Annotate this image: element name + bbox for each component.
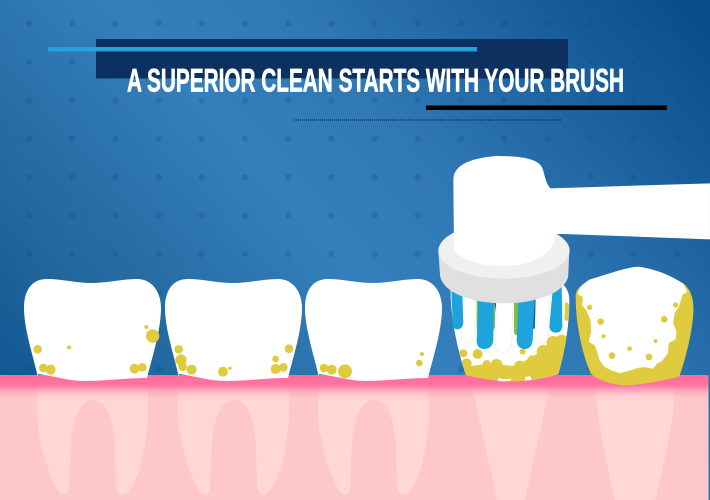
cyan accent line — [48, 47, 477, 52]
clean enamel area — [578, 267, 687, 373]
black accent line — [426, 106, 667, 110]
brush head disk top — [438, 223, 570, 279]
white patches in plaque — [498, 376, 532, 381]
tooth 4 being brushed — [451, 283, 570, 383]
tooth 2 with plaque dots — [165, 279, 302, 381]
brush head disk side — [438, 250, 569, 303]
tooth 3 with plaque dots — [305, 279, 442, 381]
brush head and handle — [453, 156, 710, 266]
bristles — [451, 283, 562, 352]
tooth roots — [37, 385, 675, 500]
dotted accent line — [294, 119, 562, 121]
plaque on tooth 4 — [457, 302, 570, 383]
gum — [0, 375, 708, 500]
tooth 5 with heavy tartar — [576, 267, 693, 385]
tooth 1 with plaque dots — [24, 279, 161, 381]
title banner block — [96, 39, 568, 78]
toothbrush — [438, 156, 710, 303]
